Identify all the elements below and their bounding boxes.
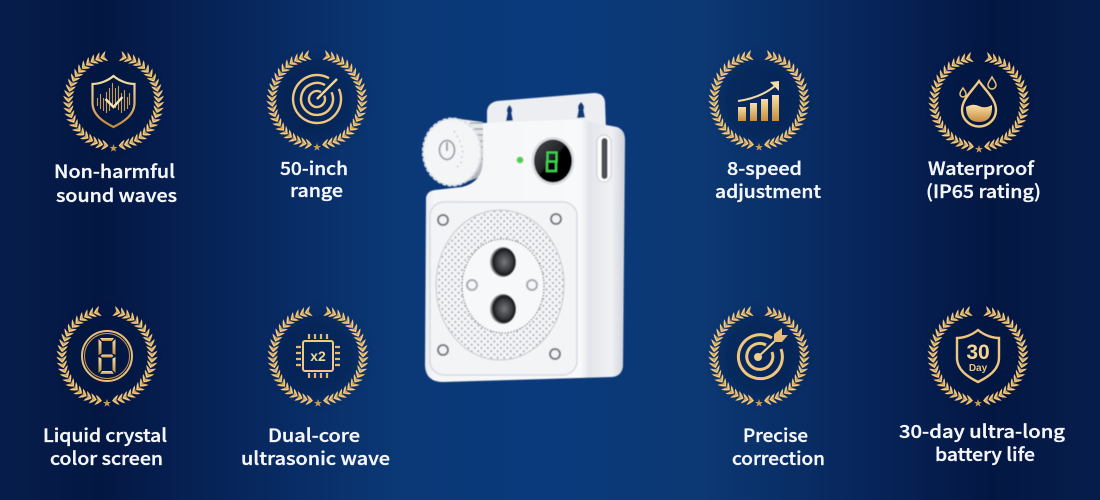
- label: [241, 422, 390, 471]
- indicator LED: [517, 157, 523, 163]
- wreath and 30 day shield icon: Day: [969, 363, 988, 374]
- label: 30-day ultra-long: [899, 418, 1066, 444]
- wreath and radar icon: [266, 50, 368, 151]
- wreath and bar chart icon: [708, 50, 810, 151]
- upper lens: [490, 247, 516, 277]
- label: Waterproof: [928, 155, 1035, 181]
- badge: precise correction: [708, 306, 825, 471]
- label: sound waves: [56, 182, 177, 208]
- display: [532, 137, 574, 185]
- front panel: [430, 202, 577, 375]
- label: ultrasonic wave: [241, 445, 390, 471]
- label: [54, 158, 177, 208]
- label: color screen: [50, 445, 163, 471]
- knob scale dots: [454, 131, 463, 169]
- label: [280, 155, 348, 203]
- mounting tab: [487, 93, 606, 130]
- product: white ultrasonic device: [423, 93, 625, 382]
- label: [926, 155, 1041, 204]
- label: battery life: [935, 441, 1035, 467]
- badge: liquid crystal color screen: [43, 306, 167, 471]
- speaker centre: [462, 239, 544, 333]
- label: Liquid crystal: [43, 422, 167, 448]
- lower lens: [490, 294, 516, 324]
- wreath and water drop icon: [928, 52, 1030, 153]
- wreath and chip icon: x2: [310, 348, 326, 364]
- speaker mesh ring: [436, 210, 564, 360]
- label: 50-inch: [280, 155, 348, 181]
- knob: [423, 118, 481, 186]
- label: adjustment: [715, 178, 821, 204]
- label: (IP65 rating): [926, 178, 1041, 204]
- wreath and shield icon: [63, 51, 164, 152]
- keyhole slots: [506, 102, 585, 121]
- label: 8-speed: [727, 155, 802, 181]
- badge: non-harmful sound waves: [54, 51, 177, 208]
- wreath and seven-segment icon: [56, 306, 158, 407]
- badge: 50-inch range: [266, 50, 368, 203]
- wreath and 30 day shield icon: 30: [966, 341, 990, 364]
- label: [715, 155, 821, 204]
- label: [899, 418, 1066, 467]
- badge: 8-speed adjustment: [708, 50, 821, 204]
- label: Dual-core: [268, 422, 360, 448]
- label: correction: [732, 445, 825, 471]
- badge: waterproof IP65: [926, 52, 1041, 204]
- badge: dual-core ultrasonic wave: [241, 306, 390, 471]
- badge: 30-day battery life: [899, 306, 1066, 467]
- wreath and chip icon: [267, 306, 369, 407]
- side slot: [597, 135, 611, 182]
- centre holes: [467, 280, 537, 290]
- label: [732, 422, 825, 471]
- knob barrel: [452, 118, 483, 186]
- label: Precise: [743, 422, 808, 448]
- screws: [438, 214, 561, 359]
- label: range: [290, 177, 343, 203]
- device body: [425, 119, 625, 382]
- label: [43, 422, 167, 471]
- power icon: [440, 140, 454, 160]
- wreath and target icon: [708, 306, 810, 407]
- wreath and 30 day shield icon: [927, 306, 1029, 407]
- label: Non-harmful: [54, 158, 175, 184]
